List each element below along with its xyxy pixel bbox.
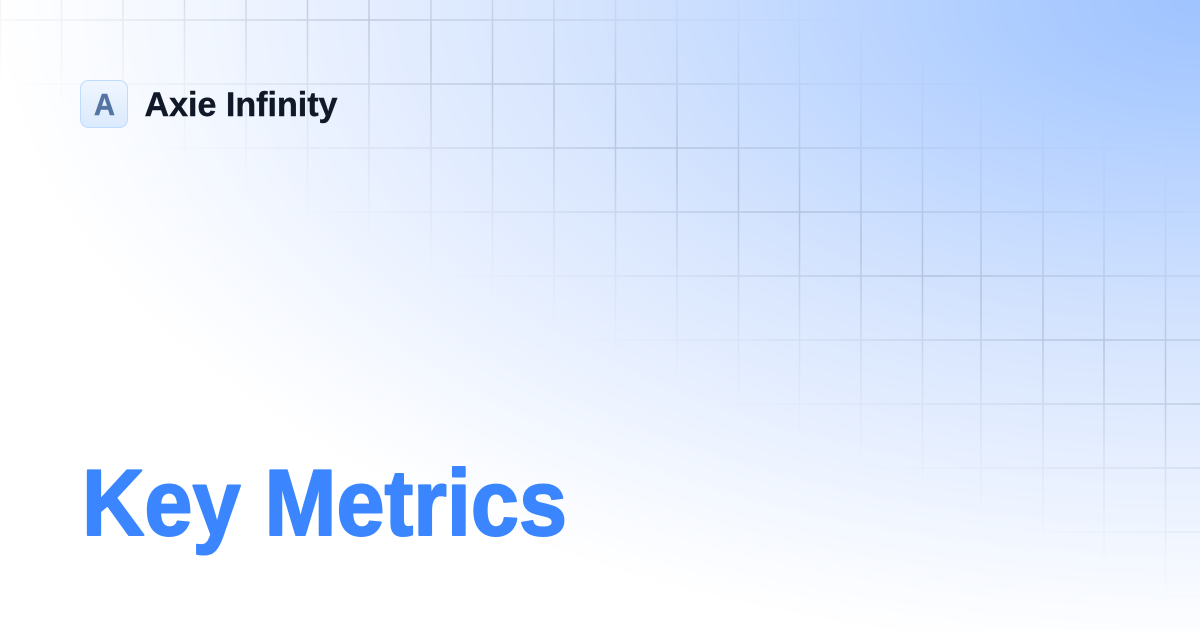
logo: Axie Infinity brand mark and name [80, 80, 338, 128]
brand name: Axie Infinity [144, 86, 338, 124]
icon: letter A badge: A [94, 87, 115, 122]
title: Key Metrics [82, 450, 567, 555]
icon: letter A badge [80, 80, 128, 128]
